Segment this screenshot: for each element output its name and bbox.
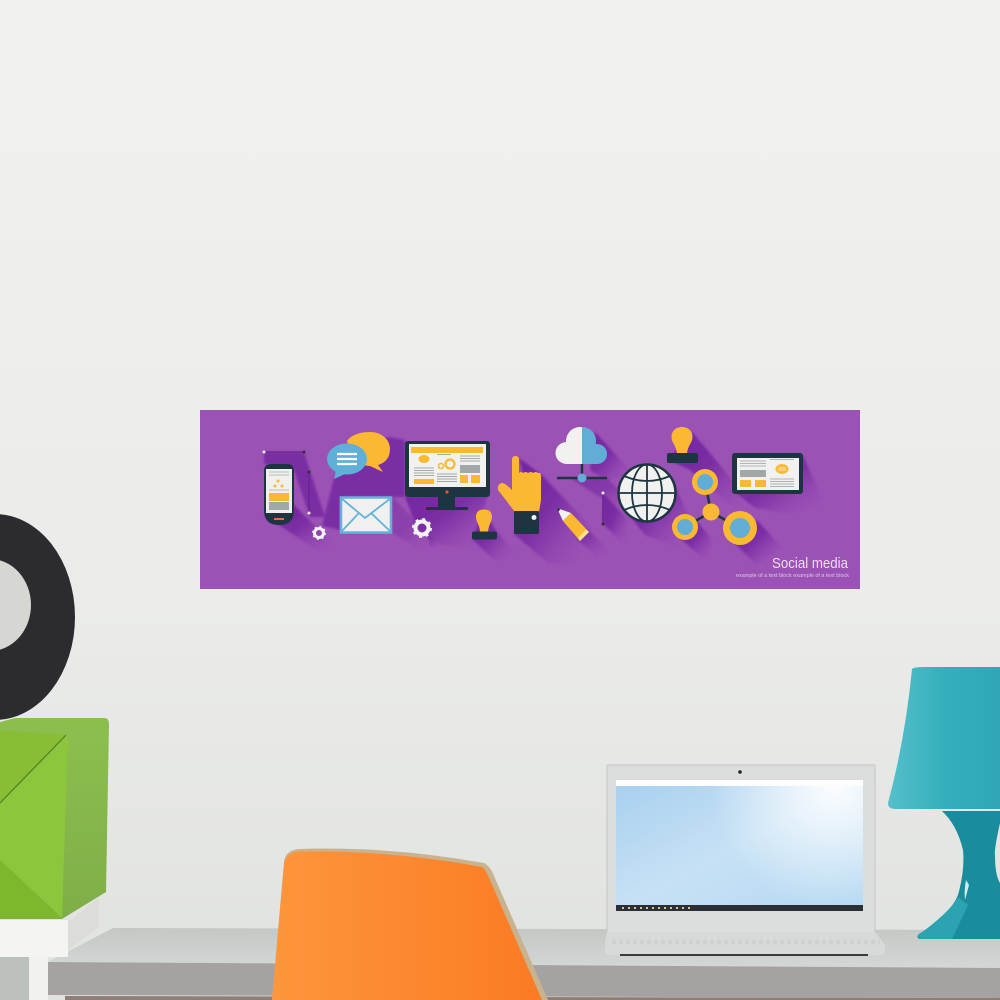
icon: small person bust: [472, 510, 497, 540]
green gift box: [0, 718, 109, 919]
icon: large gear: [413, 519, 431, 537]
caption text: example of a text block example of a text block: [736, 573, 849, 579]
icon: smartphone with anchor points: [262, 450, 310, 525]
heading: Social media: Social media: [772, 555, 849, 572]
long shadows: [264, 432, 825, 564]
icon: pencil: [557, 508, 589, 541]
icon: pointing hand: [498, 456, 541, 534]
orange chair: [272, 849, 548, 1000]
purple wall decal panel: [200, 410, 860, 589]
icon: small gear: [313, 527, 325, 539]
black ring ornament: [0, 514, 75, 720]
icon: envelope: [341, 498, 391, 532]
shelf: [48, 928, 1000, 1000]
icon: large person bust: [667, 427, 698, 463]
laptop: [605, 765, 885, 956]
icon: speech bubbles: [327, 432, 390, 479]
teal lamp: [888, 667, 1000, 939]
icon: tablet: [732, 453, 803, 494]
icon: cloud network: [556, 427, 607, 482]
icon: globe: [618, 464, 676, 522]
icon: desktop monitor: [405, 441, 490, 510]
white stand: [0, 897, 99, 1000]
icon: share network: [672, 469, 757, 545]
scene: room with wall decal: [0, 410, 1000, 1000]
anchor line: [602, 492, 604, 526]
